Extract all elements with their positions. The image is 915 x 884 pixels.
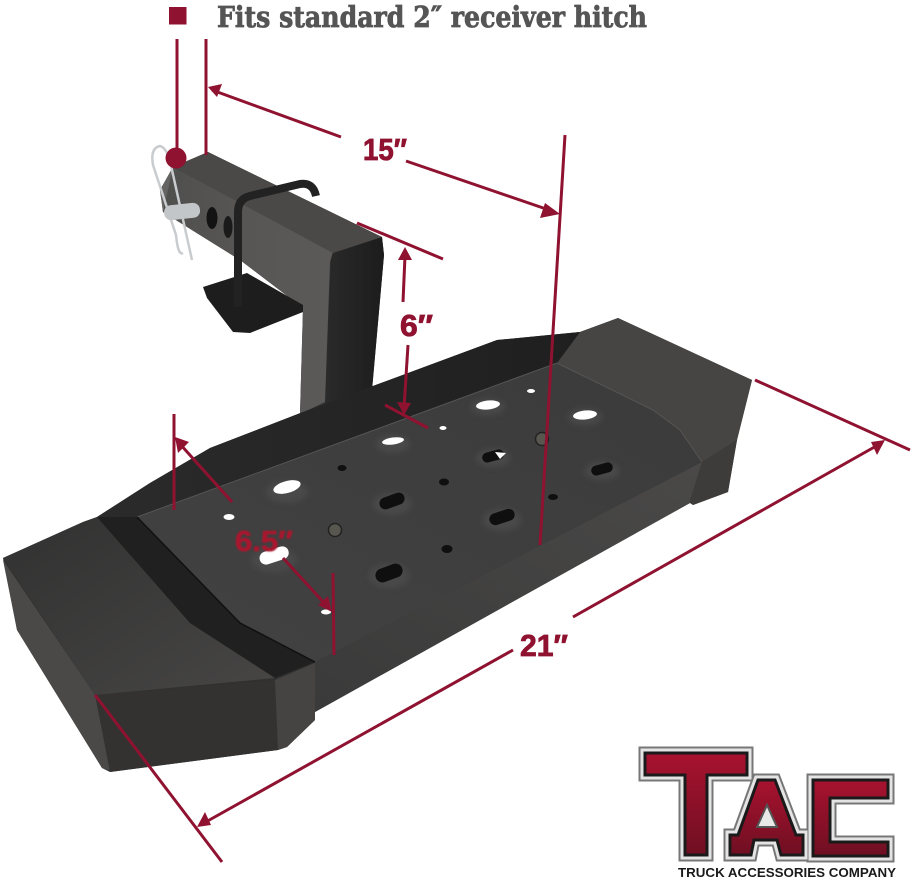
dimension: 15 inch: 15″ bbox=[363, 132, 407, 167]
step right end block and front band bbox=[315, 318, 752, 712]
tread holes bbox=[224, 389, 619, 614]
dimension: 21 inch: 21″ bbox=[520, 628, 568, 663]
step left end block bbox=[3, 517, 315, 772]
hitch receiver tube and post bbox=[160, 152, 384, 414]
step back rim and channel bbox=[97, 332, 580, 678]
dimension: 15 inch bbox=[166, 39, 565, 545]
logo: TAC Truck Accessories Company: TRUCK ACCESSORIES COMPANY bbox=[678, 866, 897, 880]
dimension: 21 inch bbox=[95, 380, 910, 862]
step tread plate bbox=[137, 363, 702, 662]
dimension: 6.5 inch bbox=[174, 414, 334, 655]
U-bolt and clamp plate bbox=[203, 184, 316, 333]
logo letters bbox=[645, 753, 888, 856]
logo: TAC Truck Accessories Company bbox=[645, 753, 897, 880]
dimension: 6 inch bbox=[357, 223, 443, 428]
hitch pin and cotter clip bbox=[152, 146, 201, 260]
heading: fits standard receiver hitch: Fits standard 2″ receiver hitch bbox=[217, 0, 647, 34]
product photo: hitch step bbox=[3, 146, 752, 772]
dimension: 6.5 inch: 6.5″ bbox=[235, 526, 293, 558]
dimension: 6 inch: 6″ bbox=[400, 308, 433, 343]
step silhouette bbox=[3, 318, 752, 772]
